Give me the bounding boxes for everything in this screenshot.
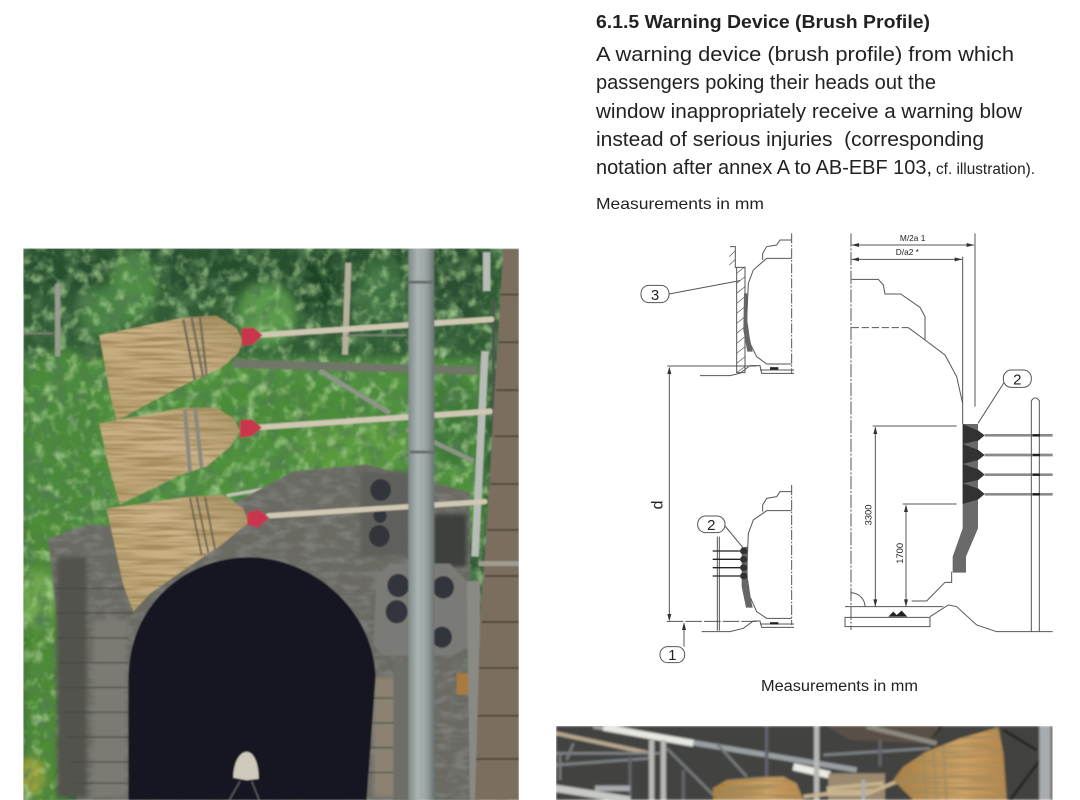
foliage texture bbox=[23, 249, 519, 800]
broom 3 bbox=[107, 495, 269, 611]
callout 1: 1 bbox=[668, 647, 677, 664]
dimension d: d bbox=[650, 501, 667, 509]
broom right bbox=[893, 727, 1007, 800]
photo: brooms in station roof bbox=[556, 726, 1053, 800]
text block: description: notation after annex A to AB-EBF 103, bbox=[596, 156, 932, 179]
width dimensions bbox=[852, 233, 975, 424]
broom handles bbox=[803, 782, 897, 797]
upper profile with wall bbox=[667, 233, 794, 376]
train light in tunnel bbox=[233, 752, 259, 780]
broom left bbox=[713, 777, 803, 800]
body outline bbox=[845, 233, 1053, 632]
height dimensions bbox=[864, 426, 957, 607]
stone wall bbox=[48, 464, 470, 800]
mast bbox=[408, 249, 436, 800]
width dimensions: M/2a 1 bbox=[900, 233, 926, 243]
height dimensions: 1700 bbox=[895, 543, 905, 564]
callout 2 left bbox=[698, 516, 743, 547]
text block: description bbox=[595, 43, 1035, 179]
rods bbox=[260, 319, 492, 516]
heading: 6.1.5 Warning Device (Brush Profile) bbox=[596, 12, 930, 32]
dimension d bbox=[650, 367, 671, 621]
stone blocks bbox=[55, 472, 467, 797]
broom 1 bbox=[99, 316, 263, 421]
text block: description: window inappropriately receive a warning blow bbox=[595, 100, 1022, 123]
text block: description: cf. illustration). bbox=[936, 161, 1035, 178]
diagram: left profiles bbox=[641, 233, 794, 664]
broom 2 bbox=[99, 408, 262, 504]
wooden bracket bbox=[828, 773, 885, 800]
distant posts and gantry bbox=[23, 263, 477, 496]
caption: measurements top: Measurements in mm bbox=[596, 196, 764, 213]
callout 3 bbox=[641, 281, 740, 304]
brush profile bbox=[953, 398, 1053, 632]
callout 2 left: 2 bbox=[707, 517, 716, 534]
text block: description: A warning device (brush profile) from which bbox=[596, 43, 1014, 66]
roof steelwork bbox=[556, 726, 1040, 800]
callout 2 right bbox=[978, 370, 1031, 423]
tunnel mouth bbox=[128, 557, 376, 800]
height dimensions: 3300 bbox=[864, 505, 874, 525]
text block: description: instead of serious injuries (corresponding bbox=[596, 128, 984, 151]
diagram: right cross-section bbox=[845, 233, 1053, 632]
right brick pier bbox=[475, 249, 519, 800]
text block: description: passengers poking their heads out the bbox=[596, 71, 936, 94]
mast right bbox=[1039, 726, 1051, 800]
lower profile with brushes bbox=[667, 485, 794, 632]
right ladder structure bbox=[475, 252, 493, 557]
photo: brooms at tunnel entrance bbox=[17, 245, 519, 800]
caption: measurements bottom: Measurements in mm bbox=[761, 678, 918, 695]
callout 2 right: 2 bbox=[1013, 372, 1022, 389]
callout 1 bbox=[660, 622, 686, 664]
signal lamps bbox=[369, 479, 480, 800]
width dimensions: D/a2 * bbox=[896, 247, 920, 257]
callout 3: 3 bbox=[651, 287, 659, 304]
